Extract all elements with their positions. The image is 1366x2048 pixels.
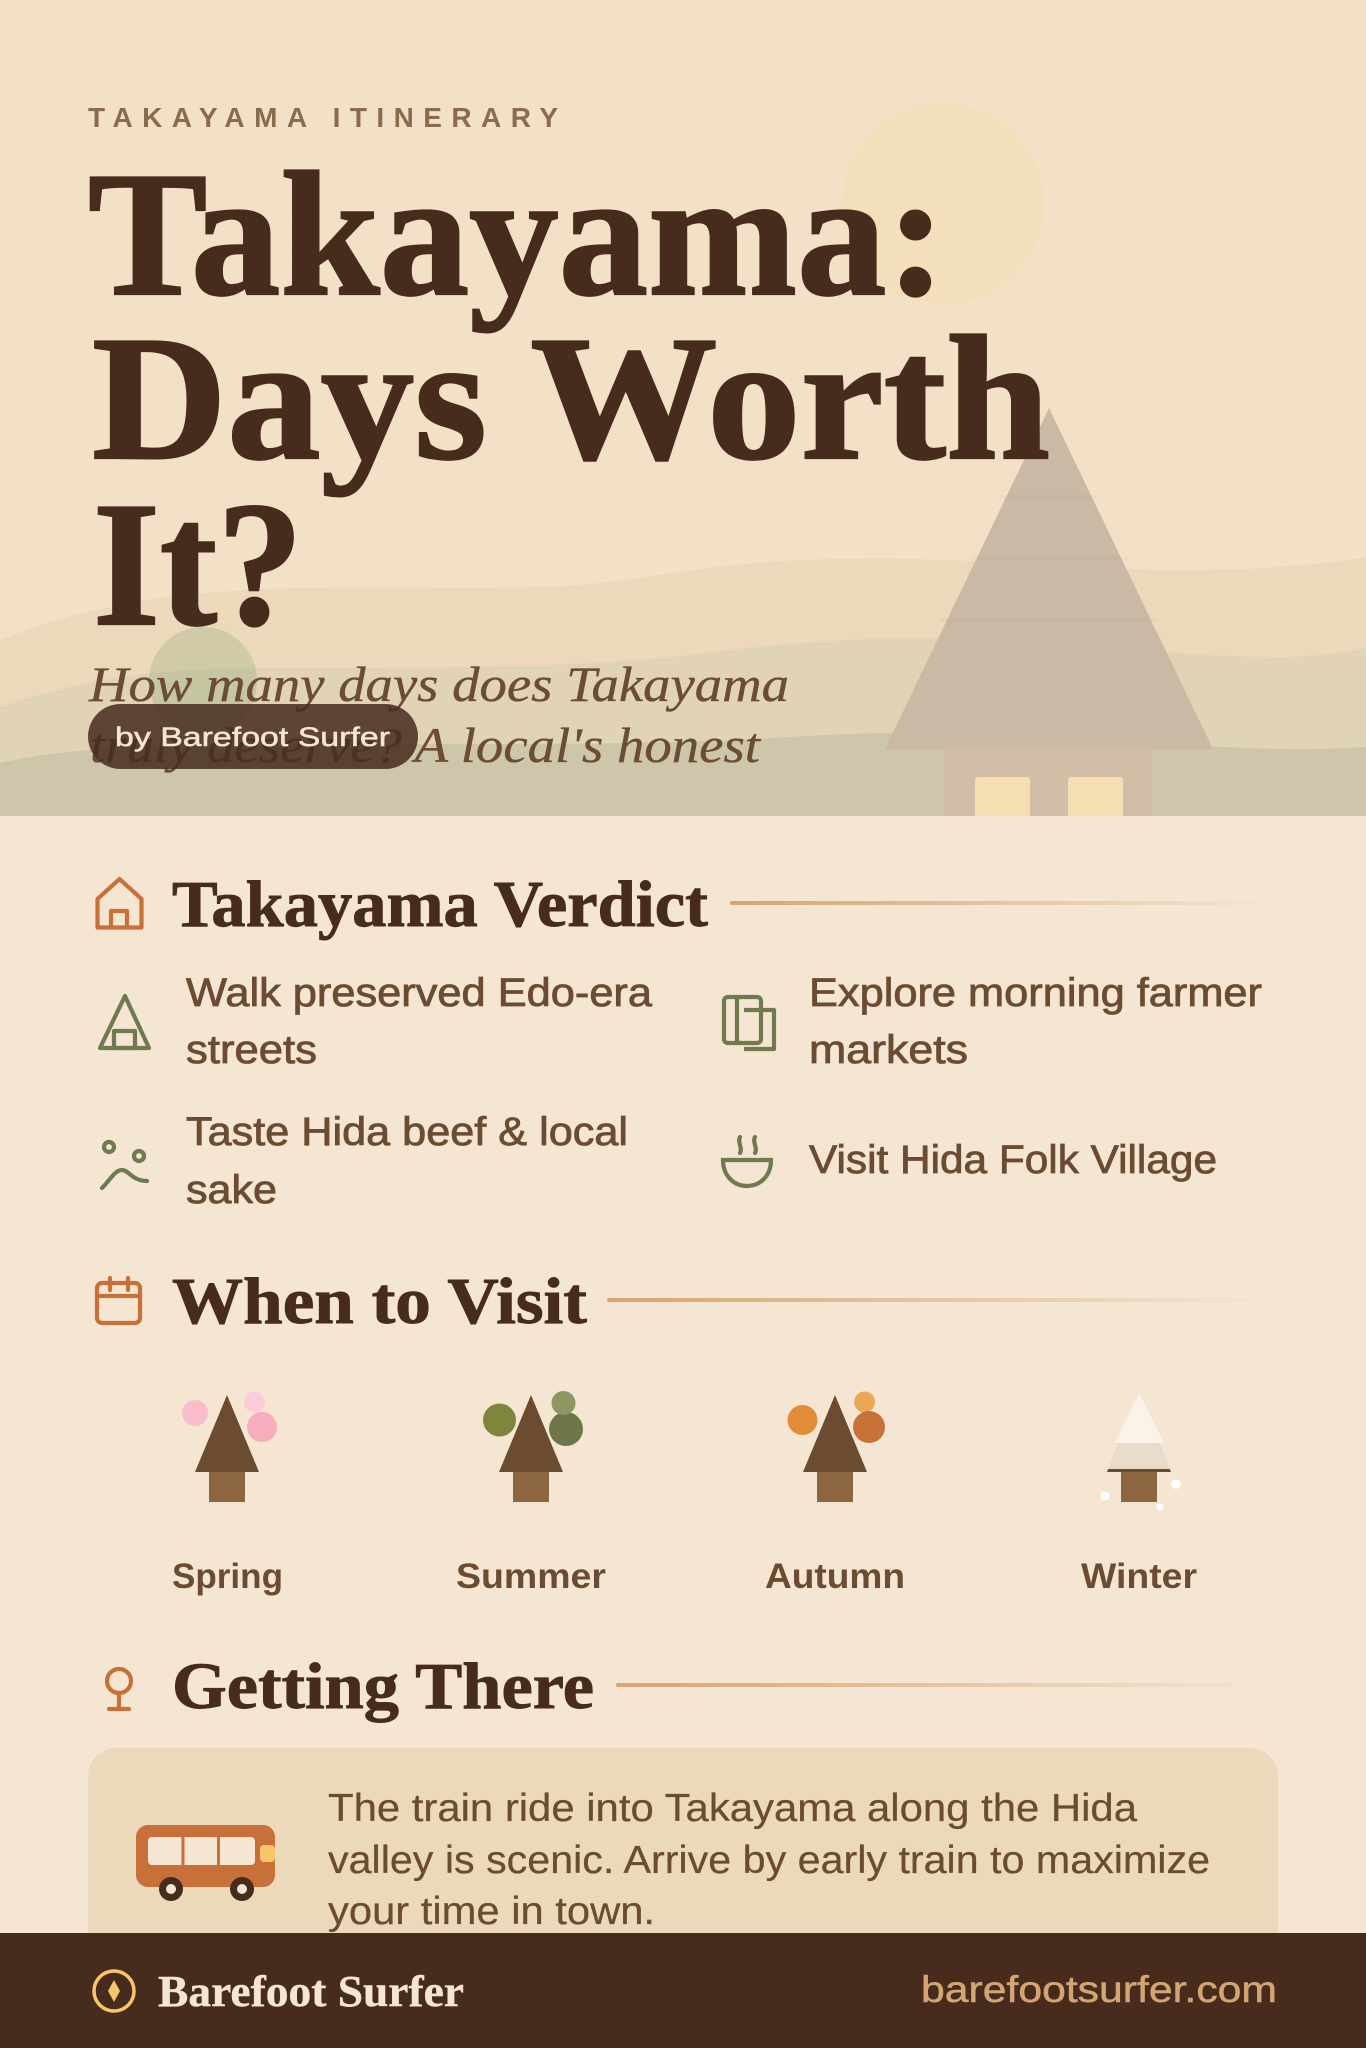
subtitle [88,656,789,773]
icon: farmhouse [100,996,149,1048]
season: winter: Winter [1081,1557,1197,1596]
heading: Getting There: Getting There [172,1650,594,1723]
hill layer far [0,557,1366,816]
title: Takayama: [88,135,946,333]
season: summer: Summer [456,1557,606,1596]
hill layer middle [0,638,1366,816]
icon: calendar heading [97,1278,140,1323]
season: winter [1081,1393,1197,1596]
season: spring: Spring [172,1557,283,1596]
icon: steaming bowl [723,1137,771,1186]
text: Walk preserved Edo-era streets [186,971,652,1072]
season: autumn [765,1392,905,1596]
text: Visit Hida Folk Village: Visit Hida Folk Village [809,1138,1217,1182]
bush [149,627,257,735]
text: Taste Hida beef & local sake [186,1110,628,1212]
hill layer near [0,733,1366,816]
season: autumn: Autumn [765,1557,905,1596]
subtitle: How many days does Takayama [88,656,789,712]
icon: house heading [98,879,142,928]
text: train description: valley is scenic. Arrive by early train to maximize [328,1839,1210,1882]
text: train description: your time in town. [328,1890,655,1933]
author pill [88,704,418,769]
season: summer [456,1391,606,1596]
icon: bus [136,1825,275,1901]
icon: location pin heading [107,1669,131,1709]
text: Explore morning farmer markets: markets [809,1028,968,1072]
text: Explore morning farmer markets: Explore morning farmer [809,971,1262,1015]
sun [842,103,1044,305]
text: Walk preserved Edo-era streets: Walk preserved Edo-era [186,971,652,1015]
author pill: by Barefoot Surfer [115,722,390,752]
title [88,135,1050,663]
panel: footer [0,1933,1366,2048]
heading: When to Visit: When to Visit [172,1265,587,1338]
text: Walk preserved Edo-era streets: streets [186,1028,317,1072]
text: Taste Hida beef & local sake: Taste Hida beef & local [186,1110,628,1154]
icon: face and wave [102,1142,147,1188]
text: Explore morning farmer markets [809,971,1262,1072]
panel: getting there card [88,1748,1278,1978]
panel: hero illustration background [0,0,1366,816]
text: train description [328,1787,1210,1933]
subtitle: truly deserve? A local's honest [90,717,761,773]
title: Days Worth [92,299,1050,497]
icon: compass [94,1971,134,2011]
season: spring [172,1392,283,1596]
website: barefootsurfer.com [921,1969,1277,2010]
brand name: Barefoot Surfer [158,1967,464,2016]
icon: book map [724,997,774,1049]
gassho farmhouse [885,408,1213,816]
text: train description: The train ride into Takayama along the Hida [328,1787,1138,1830]
eyebrow label: TAKAYAMA ITINERARY [88,102,558,133]
heading: Takayama Verdict: Takayama Verdict [172,868,708,941]
title: It? [93,465,303,663]
text: Taste Hida beef & local sake: sake [186,1168,277,1212]
